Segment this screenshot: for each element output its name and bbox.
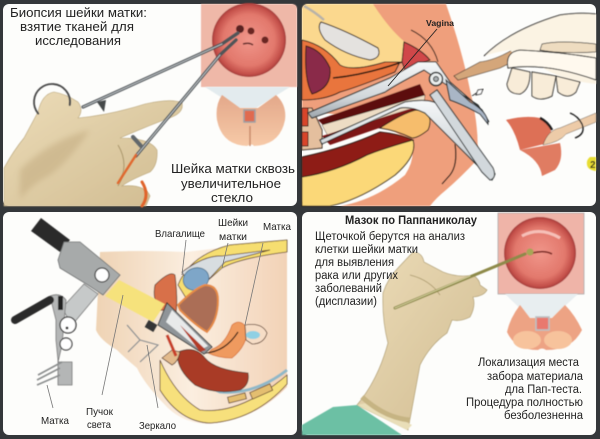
text: Pap smear description: заболеваний (315, 283, 382, 295)
icon: brush sampling detail (506, 113, 596, 176)
heading: biopsy: Биопсия шейки матки: (10, 5, 147, 20)
labels: colposcopy: Зеркало (139, 420, 176, 432)
anatomy cross-section (302, 4, 478, 206)
labels: colposcopy: матки (219, 231, 247, 243)
heading: biopsy: исследования (35, 33, 121, 48)
heading: biopsy (10, 5, 147, 48)
panel: Pap smear (302, 212, 596, 435)
icon: magnified cervix photo (201, 3, 297, 87)
text: magnifier caption: стекло (211, 190, 253, 205)
icon: anatomical location (217, 95, 285, 146)
text: Pap smear description: Щеточкой берутся на анализ (315, 231, 465, 243)
label: vagina: Vagina (426, 19, 455, 28)
labels: colposcopy: Шейки (218, 217, 248, 229)
icon: gloved hand (4, 92, 182, 206)
icon: magnified cervix photo (498, 213, 584, 294)
panel: speculum insertion (302, 4, 596, 206)
text: sampling location note: безболезненна (504, 410, 584, 422)
text: Pap smear description (315, 231, 465, 308)
badge: step number (587, 157, 596, 171)
text: Pap smear description: для выявления (315, 257, 394, 269)
heading: biopsy: взятие тканей для (20, 19, 134, 34)
labels: colposcopy: Матка (41, 415, 69, 427)
icon: gloved hand holding handle (454, 13, 596, 99)
magnifier projection cone (205, 87, 290, 108)
text: sampling location note: Процедура полностью (466, 397, 583, 409)
text: sampling location note: забора материала (487, 371, 584, 383)
text: magnifier caption: увеличительное (181, 176, 281, 191)
text: sampling location note (466, 357, 584, 422)
text: Pap smear description: рака или других (315, 270, 398, 282)
labels: colposcopy: Матка (263, 221, 291, 233)
panel: cervical biopsy (3, 3, 297, 206)
icon: colposcope (15, 218, 158, 385)
text: Pap smear description: клетки шейки матки (315, 244, 418, 256)
text: magnifier caption: Шейка матки сквозь (171, 161, 295, 176)
labels: colposcopy: Влагалище (155, 228, 205, 240)
badge: step number: 2 (590, 160, 596, 171)
anatomy cross-section (96, 240, 287, 424)
labels: colposcopy: Пучок (86, 406, 113, 418)
arrow: open direction (472, 89, 483, 96)
text: Pap smear description: (дисплазии) (315, 296, 377, 308)
heading: Pap smear: Мазок по Паппаниколау (345, 215, 478, 227)
icon: speculum (308, 62, 495, 180)
labels: colposcopy (41, 217, 291, 432)
panel: colposcopy (3, 212, 297, 435)
icon: speculum in colposcopy (145, 303, 212, 354)
light beam (105, 280, 165, 322)
text: sampling location note: дла Пап-теста. (505, 384, 582, 396)
text: sampling location note: Локализация места (478, 357, 580, 369)
magnifier projection cone (505, 294, 578, 318)
labels: colposcopy: света (87, 419, 111, 431)
text: magnifier caption (171, 161, 295, 205)
icon: biopsy forceps (27, 33, 238, 206)
icon: anatomical location (507, 305, 582, 350)
icon: gloved hand with brush (302, 248, 534, 435)
label: vagina (388, 19, 455, 86)
callout lines (47, 240, 263, 408)
